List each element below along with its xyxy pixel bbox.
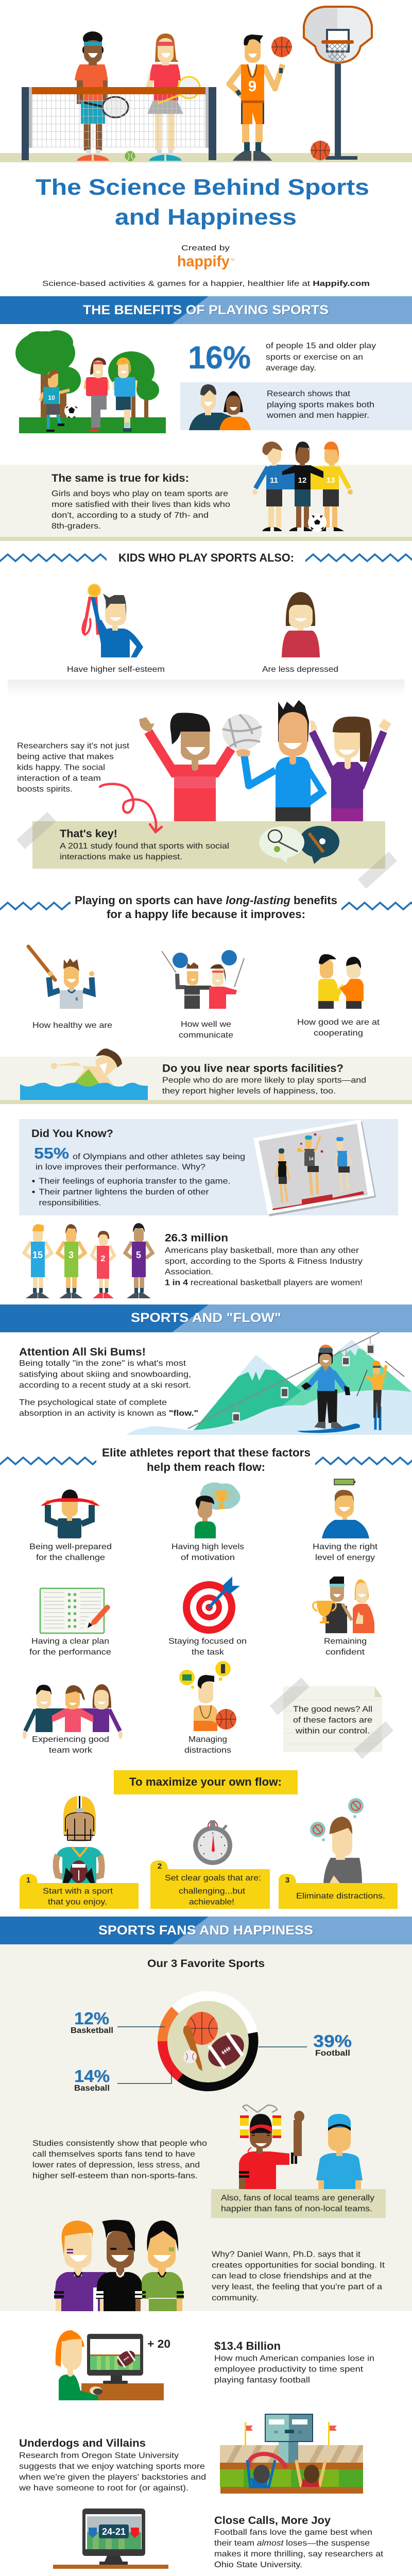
snowboarder bbox=[297, 1345, 360, 1433]
couple smiling bbox=[189, 384, 251, 430]
text: close calls: their team almost loses—the suspense bbox=[214, 2539, 370, 2548]
label: 39% football: 39% bbox=[313, 2031, 352, 2050]
label: 14% baseball: 14% bbox=[74, 2066, 110, 2086]
panel: did you know: Their feelings of euphoria transfer to the game. bbox=[39, 1177, 231, 1186]
panel: did you know: 55% bbox=[34, 1145, 69, 1162]
woman in blue top jogging bbox=[114, 358, 136, 432]
icon: boy with medal bbox=[82, 584, 143, 657]
panel: that's key: That's key! bbox=[60, 828, 117, 840]
section banner: sports fans and happiness bbox=[0, 1917, 412, 1944]
icon: golfers talking bbox=[162, 950, 244, 1009]
text: underdogs and villains bbox=[19, 2437, 206, 2493]
title: The Science Behind Sports bbox=[36, 175, 369, 200]
factor: clear plan bbox=[29, 1588, 111, 1657]
section banner: the benefits of playing sports bbox=[0, 296, 412, 324]
note: the good news: of these factors are bbox=[293, 1716, 372, 1725]
boy with soccer ball bbox=[40, 369, 79, 432]
label: 14% baseball: Baseball bbox=[74, 2084, 110, 2093]
text: 26.3 million: Americans play basketball, more than any other bbox=[165, 1246, 359, 1255]
factor: staying focused bbox=[168, 1577, 247, 1657]
note: the good news: within our control. bbox=[295, 1727, 370, 1735]
boy in blue bbox=[236, 700, 327, 821]
text: attention all ski bums: The psychological state of complete bbox=[19, 1398, 167, 1407]
text: sports fans studies: lower rates of depression, less stress, and bbox=[32, 2161, 200, 2170]
step 2 card: challenging...but bbox=[179, 1887, 246, 1896]
text: underdogs and villains: Research from Oregon State University bbox=[19, 2451, 179, 2460]
text: social interaction: being active that makes bbox=[17, 752, 114, 761]
panel: the same is true for kids: Girls and boys who play on team sports are bbox=[52, 489, 228, 498]
bronze swimmer bbox=[336, 1137, 352, 1191]
illustration: three fans with face paint bbox=[54, 2219, 184, 2311]
factor: remaining confident: confident bbox=[325, 1648, 365, 1657]
text: social bonding: can lead to close friendships and at the bbox=[212, 2272, 372, 2280]
factor: right level of energy: level of energy bbox=[315, 1553, 375, 1562]
illustration: fantasy football at desk bbox=[56, 2330, 170, 2400]
three teammates with arms around each other bbox=[252, 442, 353, 532]
panel: that's key: A 2011 study found that sports with social bbox=[60, 842, 229, 851]
label: higher self-esteem: Have higher self-esteem bbox=[67, 665, 165, 674]
label: 12% basketball bbox=[71, 2009, 165, 2035]
created by happify credit: TM bbox=[231, 259, 234, 262]
labels: how sports help: How healthy we are bbox=[32, 1021, 112, 1030]
basketball player spinning a ball: 9 bbox=[248, 78, 256, 95]
text: sports fans studies: higher self-esteem than non-sports-fans. bbox=[32, 2172, 198, 2180]
icon: baseball player bbox=[28, 946, 94, 1009]
icon: boy avoiding distractions bbox=[310, 1798, 364, 1883]
illustration: stadium scoreboard with fans: 00 bbox=[274, 2431, 278, 2434]
floor basketball bbox=[311, 141, 330, 160]
text: $13.4 billion: How much American companies lose in bbox=[214, 2354, 374, 2363]
text: close calls: Close Calls, More Joy bbox=[214, 2515, 331, 2527]
illustration: fantasy football at desk: + 20 bbox=[147, 2337, 170, 2350]
step 3 card bbox=[279, 1874, 398, 1909]
factor: clear plan: Having a clear plan bbox=[31, 1637, 109, 1646]
panel: do you live near sports facilities: Do you live near sports facilities? bbox=[162, 1062, 344, 1075]
panel: that's key: interactions make us happiest. bbox=[60, 853, 182, 861]
three teammates with arms around each other: 11 bbox=[270, 476, 278, 485]
text: 26.3 million: sport, according to the Sports & Fitness Industry bbox=[165, 1257, 363, 1266]
player 3 bbox=[58, 1224, 85, 1298]
hero illustration: tennis and basketball players bbox=[0, 7, 412, 162]
factor: good team work: Experiencing good bbox=[32, 1735, 109, 1744]
label: less depressed: Are less depressed bbox=[262, 665, 338, 674]
player 15 bbox=[24, 1224, 52, 1298]
section banner: the benefits of playing sports: THE BENEFITS OF PLAYING SPORTS bbox=[83, 303, 329, 317]
text: social interaction: interaction of a team bbox=[17, 774, 101, 783]
factor: clear plan: for the performance bbox=[29, 1648, 111, 1657]
text: attention all ski bums: Attention All Ski Bums! bbox=[19, 1346, 146, 1358]
step 3 card: 3 bbox=[285, 1876, 289, 1885]
panel: women and men happier: playing sports makes both bbox=[267, 401, 374, 409]
icon: two people shaking hands bbox=[318, 954, 364, 1009]
factor: being well-prepared: for the challenge bbox=[36, 1553, 105, 1562]
panel: the same is true for kids: 8th-graders. bbox=[52, 522, 101, 531]
section banner: sports and flow bbox=[0, 1304, 412, 1332]
player 5: 5 bbox=[136, 1250, 141, 1260]
factor: good team work: team work bbox=[49, 1746, 93, 1755]
factor: high motivation: Having high levels bbox=[171, 1543, 244, 1551]
panel: did you know: responsibilities. bbox=[39, 1198, 101, 1208]
panel: the same is true for kids: more satisfied with their lives than kids who bbox=[52, 500, 230, 509]
step 2 card: achievable! bbox=[189, 1898, 234, 1906]
text: social interaction: Researchers say it's not just bbox=[17, 742, 130, 750]
text: social bonding: very least, the feeling that you're part of a bbox=[212, 2282, 382, 2292]
text: attention all ski bums: absorption in an activity is known as "flow." bbox=[19, 1409, 198, 1418]
panel: did you know: in love improves their performance. Why? bbox=[36, 1163, 205, 1172]
silver swimmer bbox=[276, 1148, 289, 1203]
text: close calls: makes it more thrilling, say researchers at bbox=[214, 2550, 384, 2558]
text: $13.4 billion: playing fantasy football bbox=[214, 2376, 310, 2384]
donut chart: favorite sports bbox=[158, 1991, 259, 2091]
callout: fans of local teams: Also, fans of local teams are generally bbox=[221, 2194, 374, 2202]
text: social interaction bbox=[17, 742, 130, 793]
label: 39% football bbox=[259, 2031, 352, 2058]
text: social bonding: creates opportunities for social bonding. It bbox=[212, 2261, 385, 2270]
heading: our 3 favorite sports: Our 3 Favorite Sports bbox=[147, 1958, 265, 1970]
label: 14% baseball bbox=[74, 2066, 171, 2093]
text: close calls: Ohio State University. bbox=[214, 2561, 302, 2569]
step 3 card: Eliminate distractions. bbox=[296, 1892, 385, 1901]
stat: 16%: of people 15 and older play bbox=[266, 342, 376, 350]
text: 26.3 million: 26.3 million bbox=[165, 1232, 228, 1244]
created by happify credit: Created by bbox=[181, 244, 230, 252]
factor: being well-prepared: Being well-prepared bbox=[29, 1543, 112, 1551]
player 2: 2 bbox=[101, 1255, 106, 1263]
icon: speech bubbles with tennis and baseball bbox=[259, 826, 339, 864]
panel: women and men happier bbox=[180, 382, 412, 430]
text: $13.4 billion: $13.4 Billion bbox=[214, 2340, 281, 2352]
gondolas bbox=[232, 1336, 374, 1422]
illustration: kids celebrating with volleyball bbox=[139, 700, 391, 821]
text: underdogs and villains: when we're given the players' backstories and bbox=[19, 2473, 206, 2482]
player 5 bbox=[125, 1223, 152, 1298]
text: $13.4 billion: employee productivity to time spent bbox=[214, 2365, 364, 2374]
illustration: fan in blue cap bbox=[316, 2114, 363, 2190]
arrow: curly red arrow bbox=[100, 784, 162, 832]
title bbox=[36, 175, 369, 230]
factor: right level of energy bbox=[313, 1479, 378, 1562]
text: close calls: Football fans love the game best when bbox=[214, 2528, 372, 2537]
factor: staying focused: Staying focused on bbox=[168, 1637, 247, 1646]
text: underdogs and villains: suggests that we enjoy watching sports more bbox=[19, 2462, 205, 2471]
basketball player spinning a ball bbox=[229, 35, 292, 161]
labels: how sports help: communicate bbox=[179, 1031, 233, 1040]
panel: did you know: Their partner lightens the burden of other bbox=[39, 1188, 209, 1196]
title: and Happiness bbox=[115, 205, 297, 230]
step 2 card bbox=[150, 1860, 270, 1909]
tennis net bbox=[22, 87, 216, 160]
stat: 16%: 16% bbox=[188, 340, 251, 376]
swimmer bbox=[20, 1048, 148, 1100]
text: sports fans studies bbox=[32, 2139, 207, 2180]
factor: remaining confident bbox=[313, 1577, 374, 1657]
volleyball bbox=[222, 714, 262, 750]
icon: football player bbox=[56, 1796, 102, 1883]
illustration: fan with beer hat bbox=[239, 2105, 304, 2189]
factor: managing distractions: distractions bbox=[184, 1746, 231, 1755]
stat: 16%: average day. bbox=[266, 364, 316, 372]
text: social bonding: community. bbox=[212, 2294, 259, 2302]
player 15: 15 bbox=[32, 1250, 43, 1260]
stat: 16% bbox=[188, 340, 376, 376]
banner: to maximize your own flow: To maximize your own flow: bbox=[129, 1775, 282, 1788]
factor: high motivation: of motivation bbox=[181, 1553, 235, 1562]
factor: good team work bbox=[23, 1684, 123, 1755]
panel: the same is true for kids: don't, according to a study of 7th- and bbox=[52, 511, 209, 520]
text: 26.3 million bbox=[165, 1232, 363, 1287]
created by happify credit: Science-based activities & games for a happier, healthier life at Happify.com bbox=[42, 280, 370, 288]
text: close calls bbox=[214, 2515, 384, 2569]
illustration: ski mountain scene bbox=[126, 1332, 412, 1435]
created by happify credit bbox=[42, 244, 370, 288]
callout: fans of local teams: happier than fans of non-local teams. bbox=[221, 2205, 372, 2213]
heading: long-lasting benefits: Playing on sports can have long-lasting benefits bbox=[75, 894, 337, 907]
factor: right level of energy: Having the right bbox=[313, 1543, 378, 1551]
panel: the same is true for kids bbox=[0, 442, 412, 541]
panel: the same is true for kids: The same is true for kids: bbox=[52, 472, 189, 484]
heading: kids who play sports also bbox=[0, 551, 412, 564]
text: 26.3 million: 1 in 4 recreational basketball players are women! bbox=[165, 1279, 363, 1287]
tennis ball bbox=[125, 151, 135, 161]
panel: do you live near sports facilities: People who do are more likely to play sports—and bbox=[162, 1076, 366, 1085]
factor: being well-prepared bbox=[29, 1489, 112, 1562]
gold swimmer: 14 bbox=[309, 1157, 314, 1161]
tennis player, red shirt bbox=[146, 33, 200, 161]
girl in purple bbox=[310, 717, 391, 821]
panel: do you live near sports facilities bbox=[0, 1048, 412, 1104]
labels: how sports help: cooperating bbox=[314, 1029, 363, 1038]
three teammates with arms around each other: 13 bbox=[327, 476, 335, 485]
woman in red top jogging bbox=[85, 358, 108, 432]
panel: did you know: Did You Know? bbox=[31, 1128, 113, 1140]
player 2 bbox=[92, 1231, 114, 1298]
heading: elite athletes report: Elite athletes report that these factors bbox=[102, 1446, 311, 1459]
panel: sports fans bbox=[0, 1944, 412, 2311]
step 2 card: 2 bbox=[158, 1862, 162, 1871]
icon: stopwatch bbox=[193, 1820, 232, 1865]
basketball hoop bbox=[304, 7, 372, 160]
heading: long-lasting benefits: for a happy life because it improves: bbox=[107, 908, 305, 921]
text: social bonding bbox=[212, 2250, 385, 2302]
illustration: stadium scoreboard with fans: 01 bbox=[298, 2431, 302, 2434]
labels: how sports help: How good we are at bbox=[297, 1018, 380, 1027]
banner: to maximize your own flow bbox=[114, 1770, 298, 1794]
tennis player, dark skin bbox=[75, 31, 128, 161]
label: 39% football: Football bbox=[315, 2049, 350, 2058]
three teammates with arms around each other: 12 bbox=[298, 476, 306, 485]
panel: do you live near sports facilities: they report higher levels of happiness, too. bbox=[162, 1087, 336, 1095]
heading: elite athletes report bbox=[0, 1446, 412, 1473]
text: attention all ski bums bbox=[19, 1346, 198, 1418]
factor: high motivation bbox=[171, 1482, 244, 1562]
labels: how sports help bbox=[32, 1018, 380, 1040]
step 1 card: that you enjoy. bbox=[48, 1898, 107, 1906]
illustration: friends exercising in the park bbox=[15, 330, 166, 433]
icon: smiling girl bbox=[282, 592, 320, 657]
callout: fans of local teams bbox=[211, 2189, 386, 2218]
created by happify credit: happify bbox=[177, 253, 230, 270]
section banner: sports and flow: SPORTS AND "FLOW" bbox=[131, 1311, 281, 1325]
step 1 card bbox=[20, 1874, 139, 1909]
factor: managing distractions bbox=[179, 1661, 236, 1755]
panel: that's key bbox=[16, 812, 397, 889]
text: social bonding: Why? Daniel Wann, Ph.D. says that it bbox=[212, 2250, 361, 2259]
panel: women and men happier: Research shows that bbox=[267, 389, 351, 398]
skier bbox=[357, 1361, 404, 1430]
panel: did you know: of Olympians and other athletes say being bbox=[73, 1153, 245, 1161]
labels: how sports help: How well we bbox=[181, 1020, 231, 1029]
section banner: sports fans and happiness: SPORTS FANS AND HAPPINESS bbox=[98, 1923, 313, 1938]
text: sports fans studies: Studies consistently show that people who bbox=[32, 2139, 207, 2148]
girl in red bbox=[139, 713, 231, 821]
illustration: close game on monitor bbox=[53, 2509, 168, 2569]
text: attention all ski bums: satisfying about skiing and snowboarding, bbox=[19, 1370, 191, 1379]
panel: did you know bbox=[19, 1119, 398, 1216]
heading: kids who play sports also: KIDS WHO PLAY SPORTS ALSO: bbox=[118, 551, 294, 564]
factor: staying focused: the task bbox=[192, 1648, 225, 1657]
step 2 card: Set clear goals that are: bbox=[165, 1874, 261, 1883]
text: social interaction: kids happy. The social bbox=[17, 764, 105, 772]
photo: podium winners bbox=[253, 1120, 376, 1216]
stat: 16%: sports or exercise on an bbox=[266, 353, 363, 362]
text: attention all ski bums: Being totally "in the zone" is what's most bbox=[19, 1359, 186, 1368]
note: the good news bbox=[270, 1677, 393, 1759]
text: social interaction: boosts spirits. bbox=[17, 785, 73, 793]
icon: four basketball players bbox=[24, 1223, 152, 1298]
text: underdogs and villains: we have someone to root for (or against). bbox=[19, 2484, 188, 2493]
boy with soccer ball: 10 bbox=[48, 394, 55, 401]
text: underdogs and villains: Underdogs and Villains bbox=[19, 2437, 146, 2449]
text: 26.3 million: Association. bbox=[165, 1267, 213, 1277]
text: sports fans studies: call themselves sports fans tend to have bbox=[32, 2150, 195, 2159]
gold swimmer bbox=[297, 1133, 323, 1195]
text: attention all ski bums: according to a recent study at a ski resort. bbox=[19, 1381, 191, 1390]
illustration: stadium scoreboard with fans bbox=[220, 2414, 363, 2494]
factor: remaining confident: Remaining bbox=[324, 1637, 367, 1646]
panel: women and men happier: women and men happier. bbox=[266, 411, 369, 420]
label: 12% basketball: Basketball bbox=[71, 2026, 113, 2035]
note: the good news: The good news? All bbox=[293, 1705, 372, 1714]
illustration: close game on monitor: 24-21 bbox=[102, 2527, 126, 2537]
step 1 card: 1 bbox=[26, 1876, 30, 1885]
factor: managing distractions: Managing bbox=[188, 1735, 227, 1744]
text: $13.4 billion bbox=[214, 2340, 374, 2384]
player 3: 3 bbox=[68, 1250, 74, 1260]
heading: long-lasting benefits bbox=[0, 894, 412, 921]
step 1 card: Start with a sport bbox=[43, 1887, 113, 1896]
icon: baseball player: 6 bbox=[75, 996, 78, 1002]
label: 12% basketball: 12% bbox=[74, 2009, 109, 2028]
heading: elite athletes report: help them reach flow: bbox=[147, 1461, 265, 1473]
